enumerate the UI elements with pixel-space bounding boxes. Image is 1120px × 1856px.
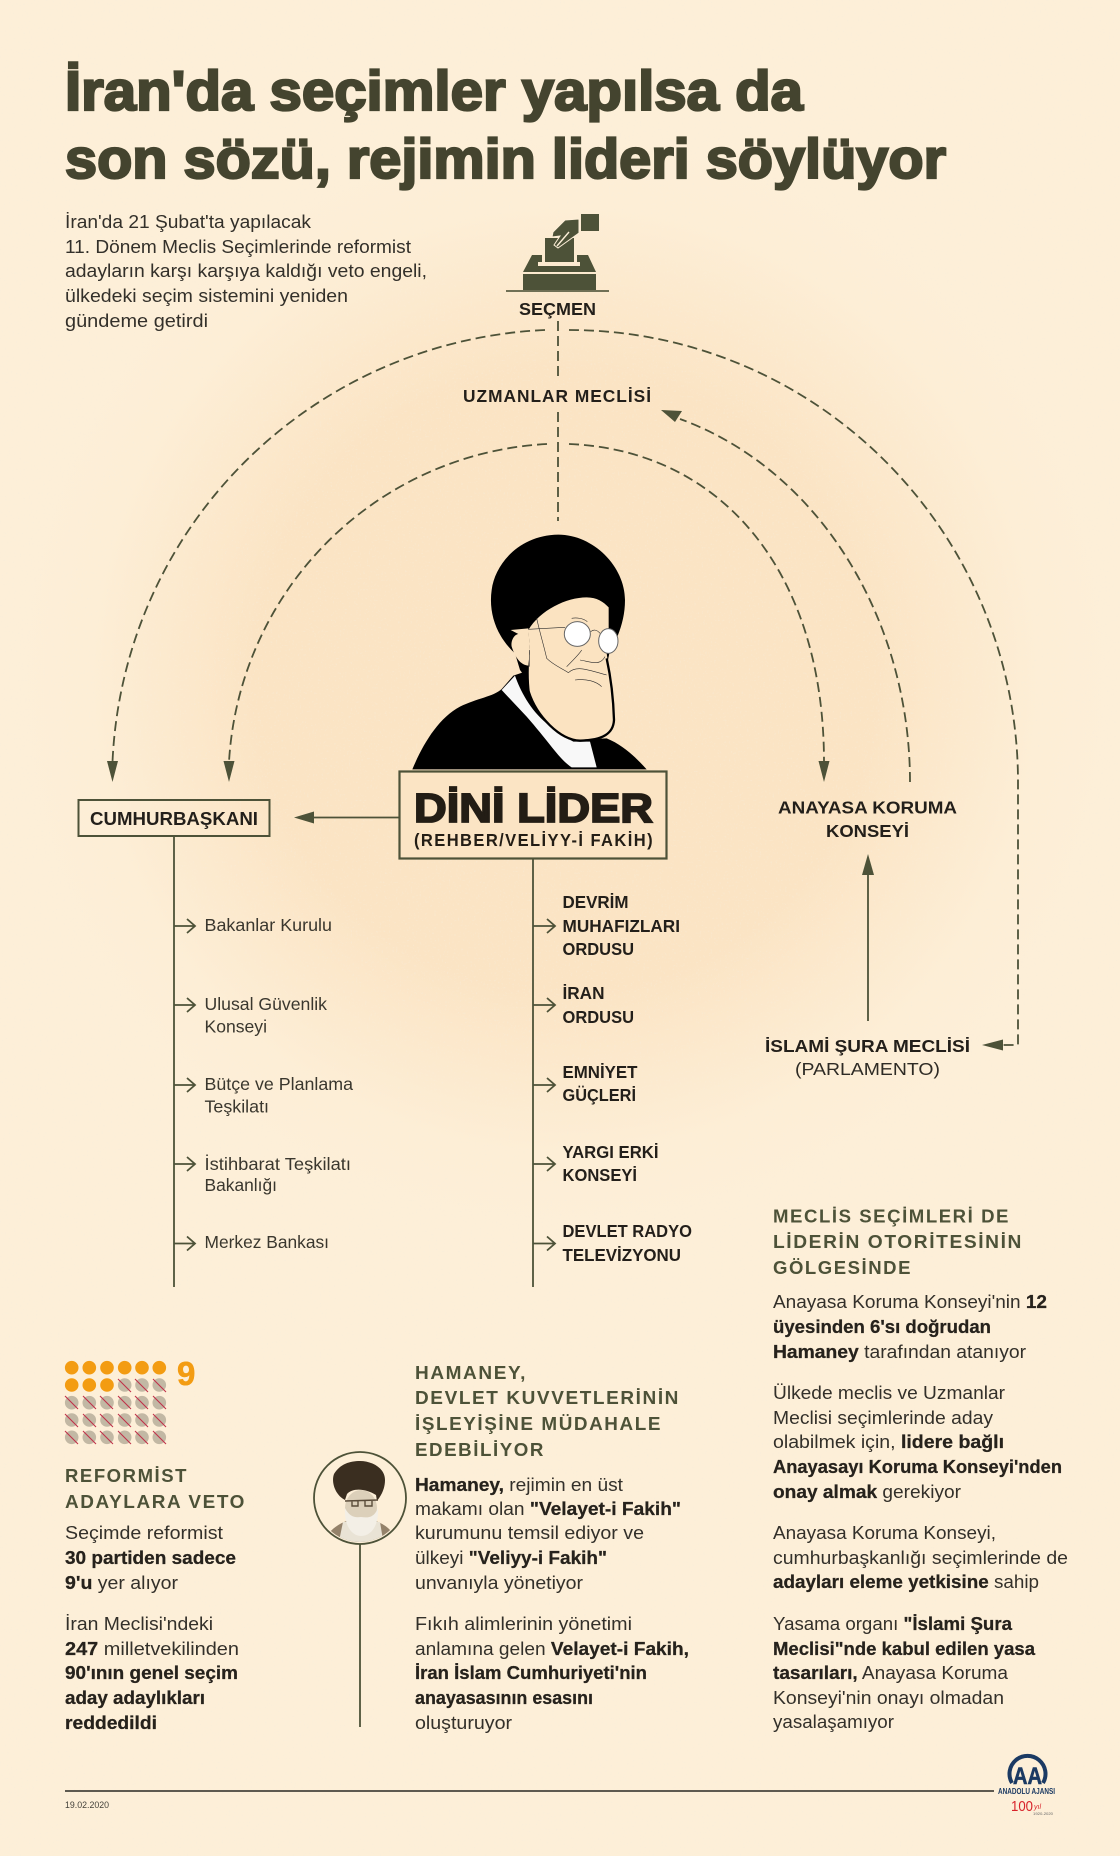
text block: velayet-i fakih: kurumunu temsil ediyor ve bbox=[415, 1522, 644, 1543]
text block: presidential elimination: Anayasa Koruma Konseyi, bbox=[773, 1522, 996, 1543]
heading: reformist veto bbox=[65, 1466, 246, 1512]
text block: parties: Seçimde reformist bbox=[65, 1522, 223, 1543]
number: 9: 9 bbox=[177, 1355, 195, 1392]
list: leader institutions bbox=[562, 892, 692, 1265]
text block: candidates: Ülkede meclis ve Uzmanlar bbox=[773, 1382, 1005, 1403]
heading: meclis seçimleri bbox=[773, 1206, 1023, 1278]
logo: anadolu ajansi: ANADOLU AJANSI bbox=[998, 1786, 1055, 1796]
heading: dini lider: DİNİ LİDER bbox=[414, 785, 653, 831]
heading: hamaney: DEVLET KUVVETLERİNİN bbox=[415, 1388, 680, 1408]
dashed line: seçmen to uzmanlar bbox=[557, 321, 559, 380]
heading: meclis seçimleri: MECLİS SEÇİMLERİ DE bbox=[773, 1206, 1010, 1226]
text block: presidential elimination: cumhurbaşkanlığı seçimlerinde de bbox=[773, 1547, 1068, 1568]
label: uzmanlar meclisi: UZMANLAR MECLİSİ bbox=[463, 386, 652, 406]
date: 19.02.2020 bbox=[65, 1800, 109, 1811]
list: leader institutions: KONSEYİ bbox=[562, 1165, 637, 1185]
text block: presidential elimination: adayları eleme yetkisine sahip bbox=[773, 1571, 1039, 1592]
text block: deputies bbox=[65, 1613, 239, 1733]
tree: leader branches bbox=[533, 859, 555, 1287]
box: dini lider bbox=[400, 772, 666, 858]
list: president institutions bbox=[204, 915, 353, 1252]
text block: velayet-i fakih: ülkeyi "Veliyy-i Fakih" bbox=[415, 1547, 607, 1568]
text block: deputies: İran Meclisi'ndeki bbox=[65, 1613, 213, 1634]
list: leader institutions: EMNİYET bbox=[562, 1062, 638, 1082]
panel: hamaney bbox=[415, 1363, 689, 1733]
intro text: adayların karşı karşıya kaldığı veto engeli, bbox=[65, 260, 427, 281]
intro text: gündeme getirdi bbox=[65, 310, 208, 331]
illustration: leader caricature bbox=[412, 535, 647, 769]
text block: velayet-i fakih: makamı olan "Velayet-i Fakih" bbox=[415, 1498, 681, 1519]
list: president institutions: Konseyi bbox=[204, 1016, 267, 1036]
arc: anayasa koruma to uzmanlar bbox=[661, 410, 910, 782]
text block: candidates: olabilmek için, lidere bağlı bbox=[773, 1431, 1004, 1452]
list: leader institutions: GÜÇLERİ bbox=[562, 1085, 636, 1105]
label: anayasa koruma konseyi: KONSEYİ bbox=[826, 821, 909, 841]
text block: legislation: Meclisi"nde kabul edilen yasa bbox=[773, 1638, 1036, 1659]
text block: constitution: İran İslam Cumhuriyeti'nin bbox=[415, 1662, 647, 1683]
text block: parties: 9'u yer alıyor bbox=[65, 1572, 178, 1593]
text block: deputies: aday adaylıkları bbox=[65, 1687, 205, 1708]
heading: meclis seçimleri: GÖLGESİNDE bbox=[773, 1258, 912, 1278]
logo: anadolu ajansi: AA bbox=[1013, 1763, 1042, 1790]
list: leader institutions: DEVRİM bbox=[562, 892, 628, 912]
text block: parties bbox=[65, 1522, 236, 1593]
text block: council members: Hamaney tarafından atanıyor bbox=[773, 1341, 1026, 1362]
heading: reformist veto: REFORMİST bbox=[65, 1466, 188, 1486]
title: son sözü, rejimin lideri söylüyor bbox=[65, 127, 946, 190]
text block: constitution: anayasasının esasını bbox=[415, 1687, 593, 1708]
tree: president branches bbox=[174, 836, 195, 1287]
portrait: hamaney bbox=[314, 1452, 406, 1546]
list: president institutions: Bütçe ve Planlama bbox=[204, 1074, 353, 1094]
text block: deputies: reddedildi bbox=[65, 1712, 157, 1733]
arc: inner left to cumhurbaşkanı bbox=[224, 444, 547, 782]
intro text: 11. Dönem Meclis Seçimlerinde reformist bbox=[65, 236, 411, 257]
list: president institutions: Ulusal Güvenlik bbox=[204, 994, 327, 1014]
text block: presidential elimination bbox=[773, 1522, 1068, 1592]
label: anayasa koruma konseyi bbox=[778, 798, 957, 841]
heading: hamaney bbox=[415, 1363, 680, 1460]
heading: hamaney: İŞLEYİŞİNE MÜDAHALE bbox=[415, 1414, 662, 1434]
logo: anadolu ajansi bbox=[998, 1756, 1055, 1816]
text block: legislation: Konseyi'nin onayı olmadan bbox=[773, 1687, 1004, 1708]
heading: hamaney: EDEBİLİYOR bbox=[415, 1440, 545, 1460]
logo: anadolu ajansi: 1920-2020 bbox=[1033, 1812, 1053, 1816]
title bbox=[65, 59, 946, 190]
list: president institutions: Teşkilatı bbox=[204, 1096, 269, 1116]
text block: constitution: anlamına gelen Velayet-i Fakih, bbox=[415, 1638, 689, 1659]
icon: ballot box bbox=[506, 214, 609, 292]
line: portrait stem bbox=[359, 1544, 361, 1727]
list: leader institutions: TELEVİZYONU bbox=[562, 1245, 681, 1265]
panel: meclis seçimleri bbox=[773, 1206, 1068, 1732]
text block: council members: üyesinden 6'sı doğrudan bbox=[773, 1316, 991, 1337]
text block: velayet-i fakih: Hamaney, rejimin en üst bbox=[415, 1474, 623, 1495]
arrow: parliament to anayasa koruma bbox=[862, 854, 874, 1021]
arc: outer right to parliament bbox=[569, 330, 1018, 1050]
text block: constitution: oluşturuyor bbox=[415, 1712, 512, 1733]
box: cumhurbaşkanı: CUMHURBAŞKANI bbox=[90, 809, 258, 829]
list: leader institutions: YARGI ERKİ bbox=[562, 1142, 658, 1162]
heading: reformist veto: ADAYLARA VETO bbox=[65, 1492, 246, 1512]
arc: inner right to anayasa koruma bbox=[569, 444, 830, 782]
text block: council members bbox=[773, 1291, 1047, 1362]
logo: anadolu ajansi: 100 bbox=[1011, 1798, 1033, 1815]
intro text: ülkedeki seçim sistemini yeniden bbox=[65, 285, 348, 306]
text block: legislation: Yasama organı "İslami Şura bbox=[773, 1613, 1013, 1634]
arc: outer left to cumhurbaşkanı bbox=[107, 330, 545, 782]
dashed line: uzmanlar to leader bbox=[557, 412, 559, 521]
list: president institutions: Merkez Bankası bbox=[204, 1232, 329, 1252]
chart: 30 party dots bbox=[65, 1355, 195, 1444]
text block: velayet-i fakih bbox=[415, 1474, 681, 1593]
text block: legislation bbox=[773, 1613, 1036, 1732]
text block: legislation: tasarıları, Anayasa Koruma bbox=[773, 1662, 1009, 1683]
text block: candidates: onay almak gerekiyor bbox=[773, 1481, 961, 1502]
intro text bbox=[65, 211, 427, 331]
text block: deputies: 247 milletvekilinden bbox=[65, 1638, 239, 1659]
label: islami şura meclisi: (PARLAMENTO) bbox=[795, 1059, 940, 1079]
logo: anadolu ajansi: yıl bbox=[1033, 1804, 1041, 1811]
title: İran'da seçimler yapılsa da bbox=[65, 59, 804, 122]
label: islami şura meclisi bbox=[765, 1036, 970, 1079]
subheading: rehber: (REHBER/VELİYY-İ FAKİH) bbox=[414, 830, 654, 850]
panel: reformist veto bbox=[65, 1466, 246, 1733]
text block: constitution bbox=[415, 1613, 689, 1733]
list: leader institutions: ORDUSU bbox=[562, 1007, 634, 1027]
list: president institutions: İstihbarat Teşkilatı bbox=[204, 1154, 351, 1174]
list: leader institutions: İRAN bbox=[562, 983, 604, 1003]
text block: parties: 30 partiden sadece bbox=[65, 1547, 236, 1568]
text block: candidates: Meclisi seçimlerinde aday bbox=[773, 1407, 994, 1428]
heading: meclis seçimleri: LİDERİN OTORİTESİNİN bbox=[773, 1232, 1023, 1252]
text block: legislation: yasalaşamıyor bbox=[773, 1711, 894, 1732]
label: islami şura meclisi: İSLAMİ ŞURA MECLİSİ bbox=[765, 1036, 970, 1056]
heading: hamaney: HAMANEY, bbox=[415, 1363, 527, 1383]
text block: velayet-i fakih: unvanıyla yönetiyor bbox=[415, 1572, 583, 1593]
list: leader institutions: ORDUSU bbox=[562, 939, 634, 959]
label: seçmen: SEÇMEN bbox=[519, 299, 596, 319]
arrow: leader to president bbox=[294, 812, 399, 824]
list: leader institutions: MUHAFIZLARI bbox=[562, 916, 680, 936]
text block: deputies: 90'ının genel seçim bbox=[65, 1662, 238, 1683]
intro text: İran'da 21 Şubat'ta yapılacak bbox=[65, 211, 312, 232]
list: leader institutions: DEVLET RADYO bbox=[562, 1221, 692, 1241]
text block: candidates bbox=[773, 1382, 1062, 1502]
text block: constitution: Fıkıh alimlerinin yönetimi bbox=[415, 1613, 632, 1634]
label: anayasa koruma konseyi: ANAYASA KORUMA bbox=[778, 798, 957, 818]
box: cumhurbaşkanı bbox=[78, 800, 270, 836]
list: president institutions: Bakanlar Kurulu bbox=[204, 915, 332, 935]
footer line bbox=[65, 1790, 994, 1792]
text block: council members: Anayasa Koruma Konseyi'nin 12 bbox=[773, 1291, 1047, 1312]
list: president institutions: Bakanlığı bbox=[204, 1175, 277, 1195]
text block: candidates: Anayasayı Koruma Konseyi'nden bbox=[773, 1456, 1062, 1477]
